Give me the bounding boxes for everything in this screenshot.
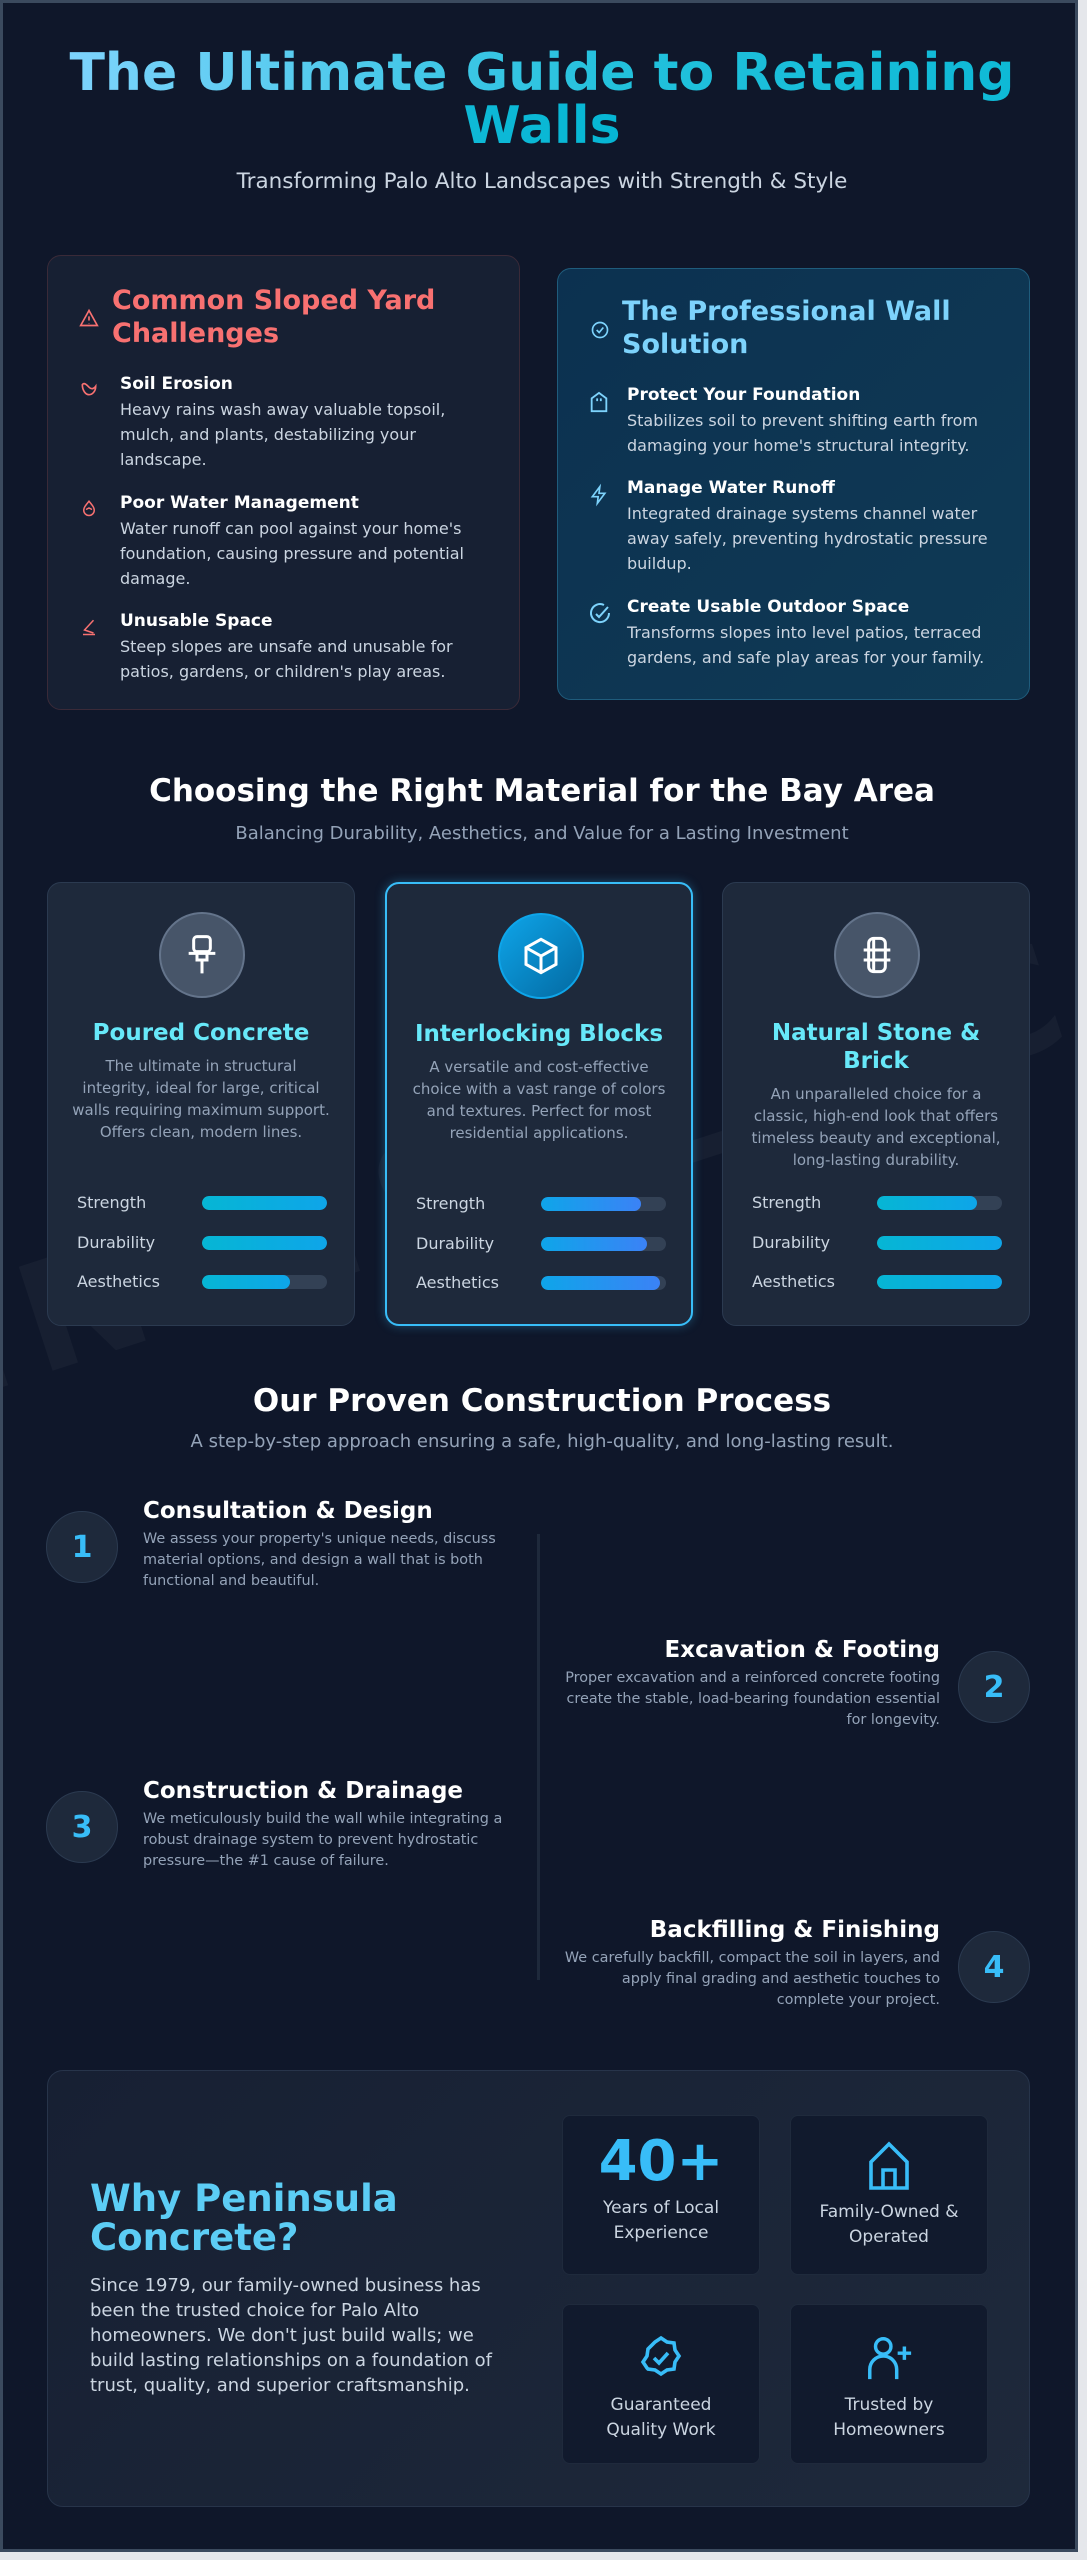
item: unusable: patios, gardens, or children's play areas. (120, 662, 445, 681)
title: Walls (463, 96, 621, 156)
title + desc: choice with a vast range of colors (413, 1080, 665, 1098)
stat: trusted: Homeowners (833, 2420, 945, 2440)
step 2: create the stable, load-bearing foundation essential (566, 1691, 940, 1707)
ratings (416, 1194, 666, 1292)
heading: solution: The Professional Wall (622, 296, 951, 327)
title + desc: integrity, ideal for large, critical (82, 1079, 320, 1097)
stat: quality: Guaranteed (611, 2395, 711, 2415)
stat: family (790, 2115, 988, 2275)
title + desc: Natural Stone & (772, 1020, 980, 1046)
ratings: Strength (77, 1193, 146, 1212)
icon: warning (79, 308, 99, 326)
ratings: Aesthetics (752, 1272, 835, 1291)
ratings: Durability (752, 1232, 830, 1252)
icon: slope (83, 620, 95, 636)
item: water: Poor Water Management (120, 493, 359, 513)
step 4: 4 (984, 1950, 1004, 1984)
heading: process: Our Proven Construction Process (253, 1383, 831, 1419)
title + desc: and textures. Perfect for most (427, 1102, 651, 1120)
stat: quality (562, 2304, 760, 2464)
item: water runoff: Manage Water Runoff (627, 478, 835, 498)
heading: challenges: Challenges (112, 318, 279, 349)
item: unusable: Steep slopes are unsafe and unusable for (120, 637, 453, 656)
heading: solution (622, 296, 951, 360)
step 1: material options, and design a wall that is both (143, 1552, 483, 1568)
step 3: We meticulously build the wall while integrating a (143, 1811, 502, 1827)
icon: drop (83, 500, 95, 516)
stat: 40+: Experience (614, 2223, 708, 2243)
item: water: damage. (120, 569, 190, 588)
ratings: Durability (416, 1234, 494, 1252)
item: foundation: Stabilizes soil to prevent shifting earth from (627, 411, 978, 430)
panel: solution (557, 268, 1030, 700)
title + desc: Brick (843, 1048, 909, 1074)
step 3 (46, 1778, 502, 1869)
icon: stone (834, 912, 920, 998)
stat: trusted: Trusted by (845, 2395, 933, 2415)
item: soil erosion (120, 374, 445, 469)
icon: check circle (592, 322, 608, 338)
heading: materials: Choosing the Right Material for the Bay Area (149, 773, 935, 809)
heading: challenges (112, 285, 435, 349)
heading: why: Concrete? (90, 2216, 298, 2259)
title + desc: An unparalleled choice for a (771, 1085, 981, 1103)
icon: building (590, 392, 608, 412)
step 2: Proper excavation and a reinforced concrete footing (565, 1670, 940, 1686)
subheading: materials: Balancing Durability, Aesthetics, and Value for a Lasting Investment (235, 823, 849, 844)
step 1: Consultation & Design (143, 1498, 433, 1524)
panel: why us (47, 2070, 1030, 2507)
ratings: Durability (77, 1232, 155, 1252)
title + desc: Offers clean, modern lines. (100, 1123, 302, 1141)
icon: erosion (82, 382, 96, 396)
step 1 (46, 1498, 496, 1589)
item: soil erosion: landscape. (120, 450, 207, 469)
step 3: robust drainage system to prevent hydrostatic (143, 1832, 478, 1848)
heading: why: Why Peninsula (90, 2177, 398, 2220)
icon: bolt (590, 484, 606, 506)
title + desc: residential applications. (450, 1124, 628, 1142)
title + desc: Interlocking Blocks (415, 1021, 663, 1047)
step 2: Excavation & Footing (665, 1637, 940, 1663)
title (69, 43, 1015, 156)
step 3: Construction & Drainage (143, 1778, 463, 1804)
stat: 40+ (562, 2115, 760, 2275)
stat: family: Family-Owned & (820, 2202, 958, 2222)
title + desc: A versatile and cost-effective (429, 1058, 649, 1076)
item: soil erosion: Soil Erosion (120, 374, 233, 394)
step 4: We carefully backfill, compact the soil in layers, and (565, 1950, 940, 1966)
heading: challenges: Common Sloped Yard (112, 285, 435, 316)
item: soil erosion: mulch, and plants, destabilizing your (120, 425, 416, 444)
item: water runoff: buildup. (627, 554, 692, 573)
ratings (77, 1193, 327, 1291)
ratings: Strength (752, 1193, 821, 1212)
ratings (752, 1193, 1002, 1291)
text: about: been the trusted choice for Palo Alto (90, 2300, 419, 2321)
title + desc: classic, high-end look that offers (754, 1107, 998, 1125)
step 4: apply final grading and aesthetic touches to (622, 1971, 940, 1987)
subtitle: Transforming Palo Alto Landscapes with Strength & Style (237, 169, 847, 194)
heading: why (90, 2177, 398, 2259)
item: outdoor space: Transforms slopes into level patios, terraced (627, 623, 981, 642)
text: about (90, 2275, 492, 2396)
step 1: 1 (72, 1530, 92, 1564)
ratings: Aesthetics (416, 1273, 499, 1292)
title + desc: The ultimate in structural (105, 1057, 297, 1075)
stat: quality: Quality Work (606, 2420, 716, 2440)
item: water runoff: Integrated drainage systems channel water (627, 504, 977, 523)
title + desc: walls requiring maximum support. (72, 1101, 330, 1119)
item: unusable: Unusable Space (120, 611, 273, 631)
step 3: pressure—the #1 cause of failure. (143, 1853, 389, 1869)
card: interlocking blocks (385, 882, 693, 1326)
step 1: functional and beautiful. (143, 1573, 319, 1589)
heading: solution: Solution (622, 329, 748, 360)
icon: check (590, 603, 610, 624)
icon: cube (498, 913, 584, 999)
step 4: Backfilling & Finishing (650, 1917, 940, 1943)
stat: trusted (790, 2304, 988, 2464)
step 3: 3 (72, 1810, 92, 1844)
item: foundation: damaging your home's structural integrity. (627, 436, 969, 455)
title + desc (72, 1020, 330, 1141)
item: water runoff: away safely, preventing hydrostatic pressure (627, 529, 988, 548)
text: about: homeowners. We don't just build walls; we (90, 2325, 474, 2346)
item: outdoor space: gardens, and safe play areas for your family. (627, 648, 984, 667)
title + desc (751, 1020, 1001, 1169)
item: water: foundation, causing pressure and potential (120, 544, 464, 563)
item: foundation (627, 385, 978, 455)
text: about: build lasting relationships on a foundation of (90, 2350, 492, 2371)
title + desc: Poured Concrete (93, 1020, 309, 1046)
step 1: We assess your property's unique needs, discuss (143, 1531, 496, 1547)
card: natural stone (722, 882, 1030, 1326)
title + desc (413, 1021, 665, 1142)
step 4 (565, 1917, 1030, 2008)
icon: concrete (159, 912, 245, 998)
item: soil erosion: Heavy rains wash away valuable topsoil, (120, 400, 445, 419)
step 2 (565, 1637, 1030, 1728)
subheading: process: A step-by-step approach ensuring a safe, high-quality, and long-lasting result. (191, 1431, 893, 1452)
item: outdoor space: Create Usable Outdoor Space (627, 597, 909, 617)
ratings: Aesthetics (77, 1272, 160, 1291)
panel: challenges (47, 255, 520, 710)
step 2: 2 (984, 1670, 1004, 1704)
item: water: Water runoff can pool against your home's (120, 519, 461, 538)
item: outdoor space (626, 597, 984, 667)
text: about: Since 1979, our family-owned business has (90, 2275, 481, 2296)
stat: family: Operated (849, 2227, 929, 2247)
item: water runoff (627, 478, 988, 573)
item: unusable (120, 611, 453, 681)
stat: 40+: 40+ (599, 2129, 723, 2194)
stat: 40+: Years of Local (603, 2198, 719, 2218)
item: water (120, 493, 464, 588)
text: about: trust, quality, and superior craftsmanship. (90, 2375, 470, 2396)
step 2: for longevity. (847, 1712, 940, 1728)
step 4: complete your project. (777, 1992, 940, 2008)
title: The Ultimate Guide to Retaining (69, 43, 1015, 103)
title + desc: timeless beauty and exceptional, (751, 1129, 1001, 1147)
ratings: Strength (416, 1194, 485, 1213)
title + desc: long-lasting durability. (793, 1151, 959, 1169)
card: poured concrete (47, 882, 355, 1326)
item: foundation: Protect Your Foundation (627, 385, 860, 405)
